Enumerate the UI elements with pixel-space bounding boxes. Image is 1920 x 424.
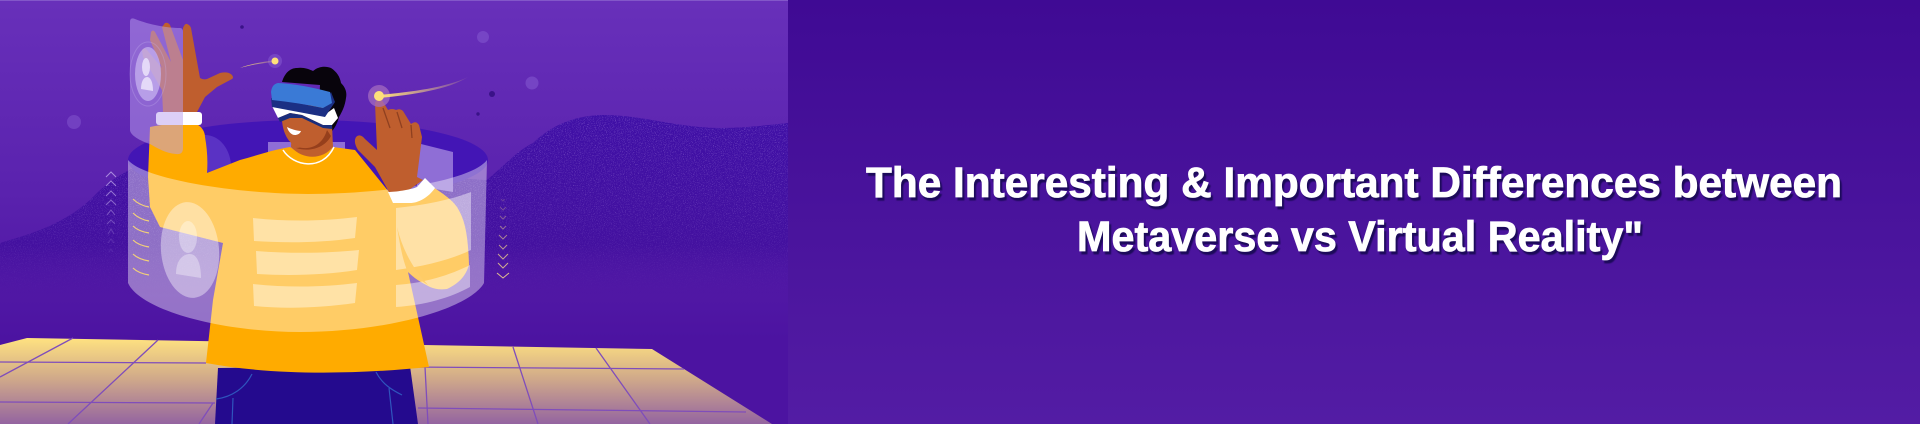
person (142, 23, 469, 424)
chevrons: left column (106, 172, 116, 252)
title (866, 159, 1842, 261)
floating dots (67, 25, 538, 129)
neck and face (282, 105, 333, 157)
left hand (142, 23, 233, 112)
illustration background (0, 1, 788, 304)
hair (282, 67, 346, 135)
content bars (253, 217, 359, 308)
VR headset (271, 83, 338, 129)
wall side panels (396, 192, 471, 307)
yellow arcs (133, 199, 149, 275)
speckled hill (0, 115, 788, 274)
right hand (355, 99, 423, 194)
neckline (283, 147, 334, 164)
cylinder: translucent front wall (128, 160, 487, 332)
pointer: right (368, 77, 468, 107)
floor grid (0, 338, 772, 424)
chevrons: right column (497, 199, 509, 278)
cylinder: back interior (128, 120, 488, 192)
upper-left glass panel (130, 18, 183, 154)
title line 2: Metaverse vs Virtual Reality" (1077, 213, 1643, 261)
sleeve fold (397, 227, 428, 285)
cuff: right (388, 178, 435, 203)
smile (287, 127, 301, 135)
panel: text background (788, 0, 1920, 424)
avatar oval (160, 202, 220, 298)
pants (215, 366, 418, 424)
title line 1: The Interesting & Important Differences between (866, 159, 1842, 207)
pointer: left (240, 54, 282, 68)
panel: illustration (0, 0, 788, 424)
cuff: left (156, 112, 202, 125)
sweater (148, 124, 469, 373)
